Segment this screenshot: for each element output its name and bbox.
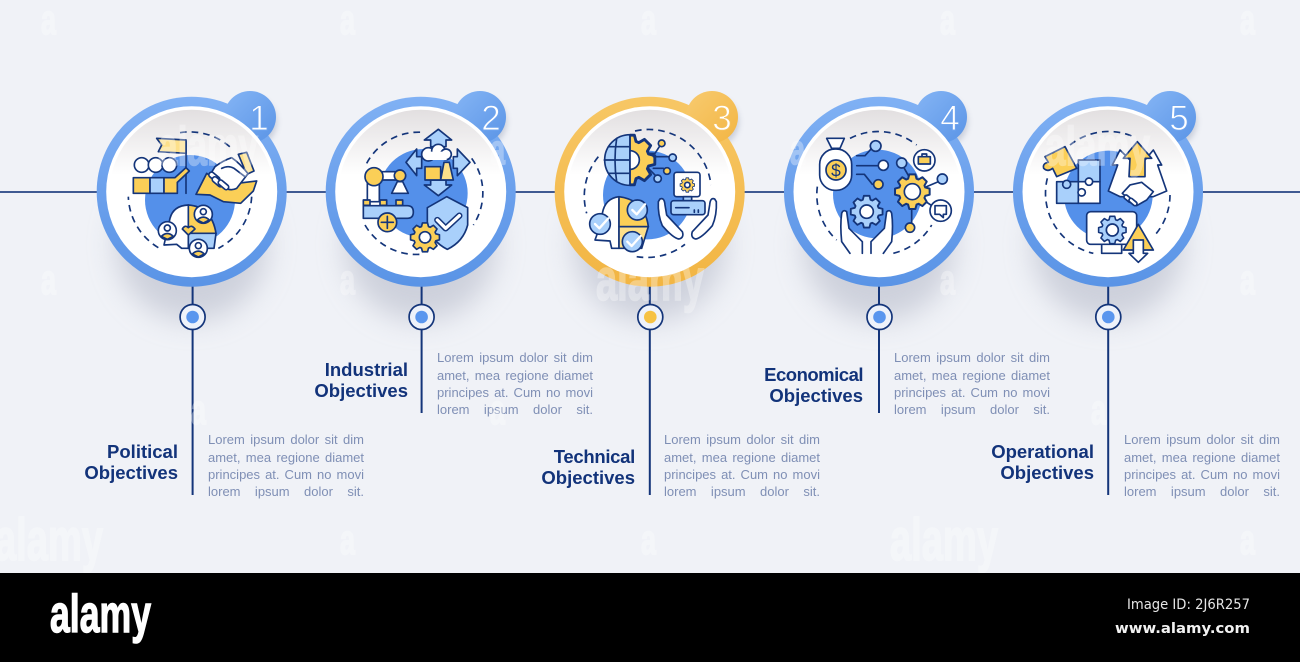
watermark overlay: a [340,516,355,563]
watermark overlay: a [1240,516,1255,563]
description text: lorem ipsum dolor sit. [1124,484,1280,499]
number badge 4: 4 [940,99,960,138]
number badge 3: 3 [712,99,732,138]
description text: Lorem ipsum dolor sit dim [208,432,364,447]
heading [84,441,178,483]
watermark overlay: alamy [596,247,704,313]
watermark overlay: alamy [1045,115,1150,177]
heading [541,446,635,488]
heading: Economical [764,364,863,385]
watermark overlay: alamy [158,115,258,177]
heading: Political [107,441,178,462]
description text [437,350,593,417]
description text: Lorem ipsum dolor sit dim [437,350,593,365]
heading: Objectives [84,462,178,483]
website: www.alamy.com [1115,621,1250,637]
step 5 graphic [1013,91,1203,495]
panel: step 3 technical objectives [541,91,820,499]
number badge 5: 5 [1169,99,1189,138]
heading [314,359,408,401]
number badge 3 [686,91,738,143]
icon: globe gear, checklist head and hands [584,129,716,257]
icon: factory, robot arm, shield and gear [363,129,483,254]
description text: Lorem ipsum dolor sit dim [664,432,820,447]
timeline node [409,304,434,330]
step 4 graphic [784,91,974,413]
description text: Lorem ipsum dolor sit dim [1124,432,1280,447]
description text: amet, mea regione diamet [437,368,593,383]
description text: principes at. Cum no movi [1124,467,1280,482]
heading: Objectives [769,385,863,406]
watermark overlay: a [41,256,56,303]
panel: step 1 political objectives [84,91,364,499]
icon: money bag, gears and hands: $ [831,160,841,180]
heading [764,364,863,406]
heading: Objectives [541,467,635,488]
watermark overlay: a [1091,386,1106,433]
description text: amet, mea regione diamet [894,368,1050,383]
panel: step 5 operational objectives [991,91,1280,499]
image id: Image ID: 2J6R257 [1127,597,1250,613]
icon: money bag, gears and hands [817,132,951,253]
number badge 2 [454,91,506,143]
number badge 5 [1144,91,1196,143]
step 1 graphic [96,91,287,495]
watermark overlay: a [490,126,505,173]
watermark overlay: a [191,386,206,433]
watermark overlay: a [340,256,355,303]
watermark overlay: alamy [0,507,103,573]
timeline node [638,304,663,330]
watermark overlay: a [641,516,656,563]
footer logo: alamy [50,585,151,644]
description text [208,432,364,499]
heading: Technical [554,446,635,467]
description text [1124,432,1280,499]
icon: team, handshake and head [128,132,257,257]
watermark overlay: a [790,126,805,173]
description text: amet, mea regione diamet [664,450,820,465]
heading: Objectives [1000,462,1094,483]
step 3 graphic [554,91,745,495]
panel: step 4 economical objectives [764,91,1050,417]
heading: Objectives [314,380,408,401]
watermark overlay: alamy [890,507,998,573]
description text [664,432,820,499]
timeline node [867,304,892,330]
description text: lorem ipsum dolor sit. [437,402,593,417]
timeline node [1096,304,1121,330]
description text: principes at. Cum no movi [894,385,1050,400]
description text: amet, mea regione diamet [1124,450,1280,465]
number badge 1: 1 [249,99,269,138]
description text: principes at. Cum no movi [208,467,364,482]
description text: lorem ipsum dolor sit. [894,402,1050,417]
description text: Lorem ipsum dolor sit dim [894,350,1050,365]
step 2 graphic [326,91,516,413]
description text: principes at. Cum no movi [437,385,593,400]
heading [991,441,1094,483]
description text: lorem ipsum dolor sit. [664,484,820,499]
watermark overlay: a [940,256,955,303]
number badge 4 [915,91,967,143]
heading: Industrial [325,359,408,380]
watermark overlay: a [490,386,505,433]
number badge 1 [224,91,276,143]
footer bar [0,573,1300,662]
description text: amet, mea regione diamet [208,450,364,465]
heading: Operational [991,441,1094,462]
watermark overlay: a [1240,256,1255,303]
panel: step 2 industrial objectives [314,91,593,417]
description text [894,350,1050,417]
icon: puzzle, arrows, handshake and monitor [1043,131,1170,262]
description text: lorem ipsum dolor sit. [208,484,364,499]
number badge 2: 2 [481,99,501,138]
description text: principes at. Cum no movi [664,467,820,482]
timeline node [180,304,205,330]
